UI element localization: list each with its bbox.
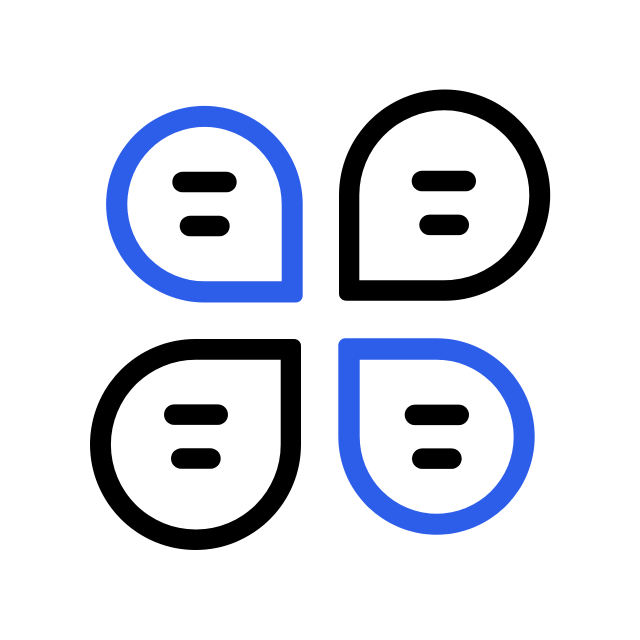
bubble: top right (black)	[339, 90, 550, 301]
lines: top left bubble	[172, 172, 237, 236]
bubble: top left (blue)	[106, 106, 303, 302]
bubble: bottom left (black)	[90, 339, 301, 550]
bubble: bottom right (blue)	[338, 338, 535, 535]
lines: top right bubble	[412, 171, 476, 235]
lines: bottom left bubble	[164, 404, 228, 469]
lines: bottom right bubble	[405, 405, 469, 469]
